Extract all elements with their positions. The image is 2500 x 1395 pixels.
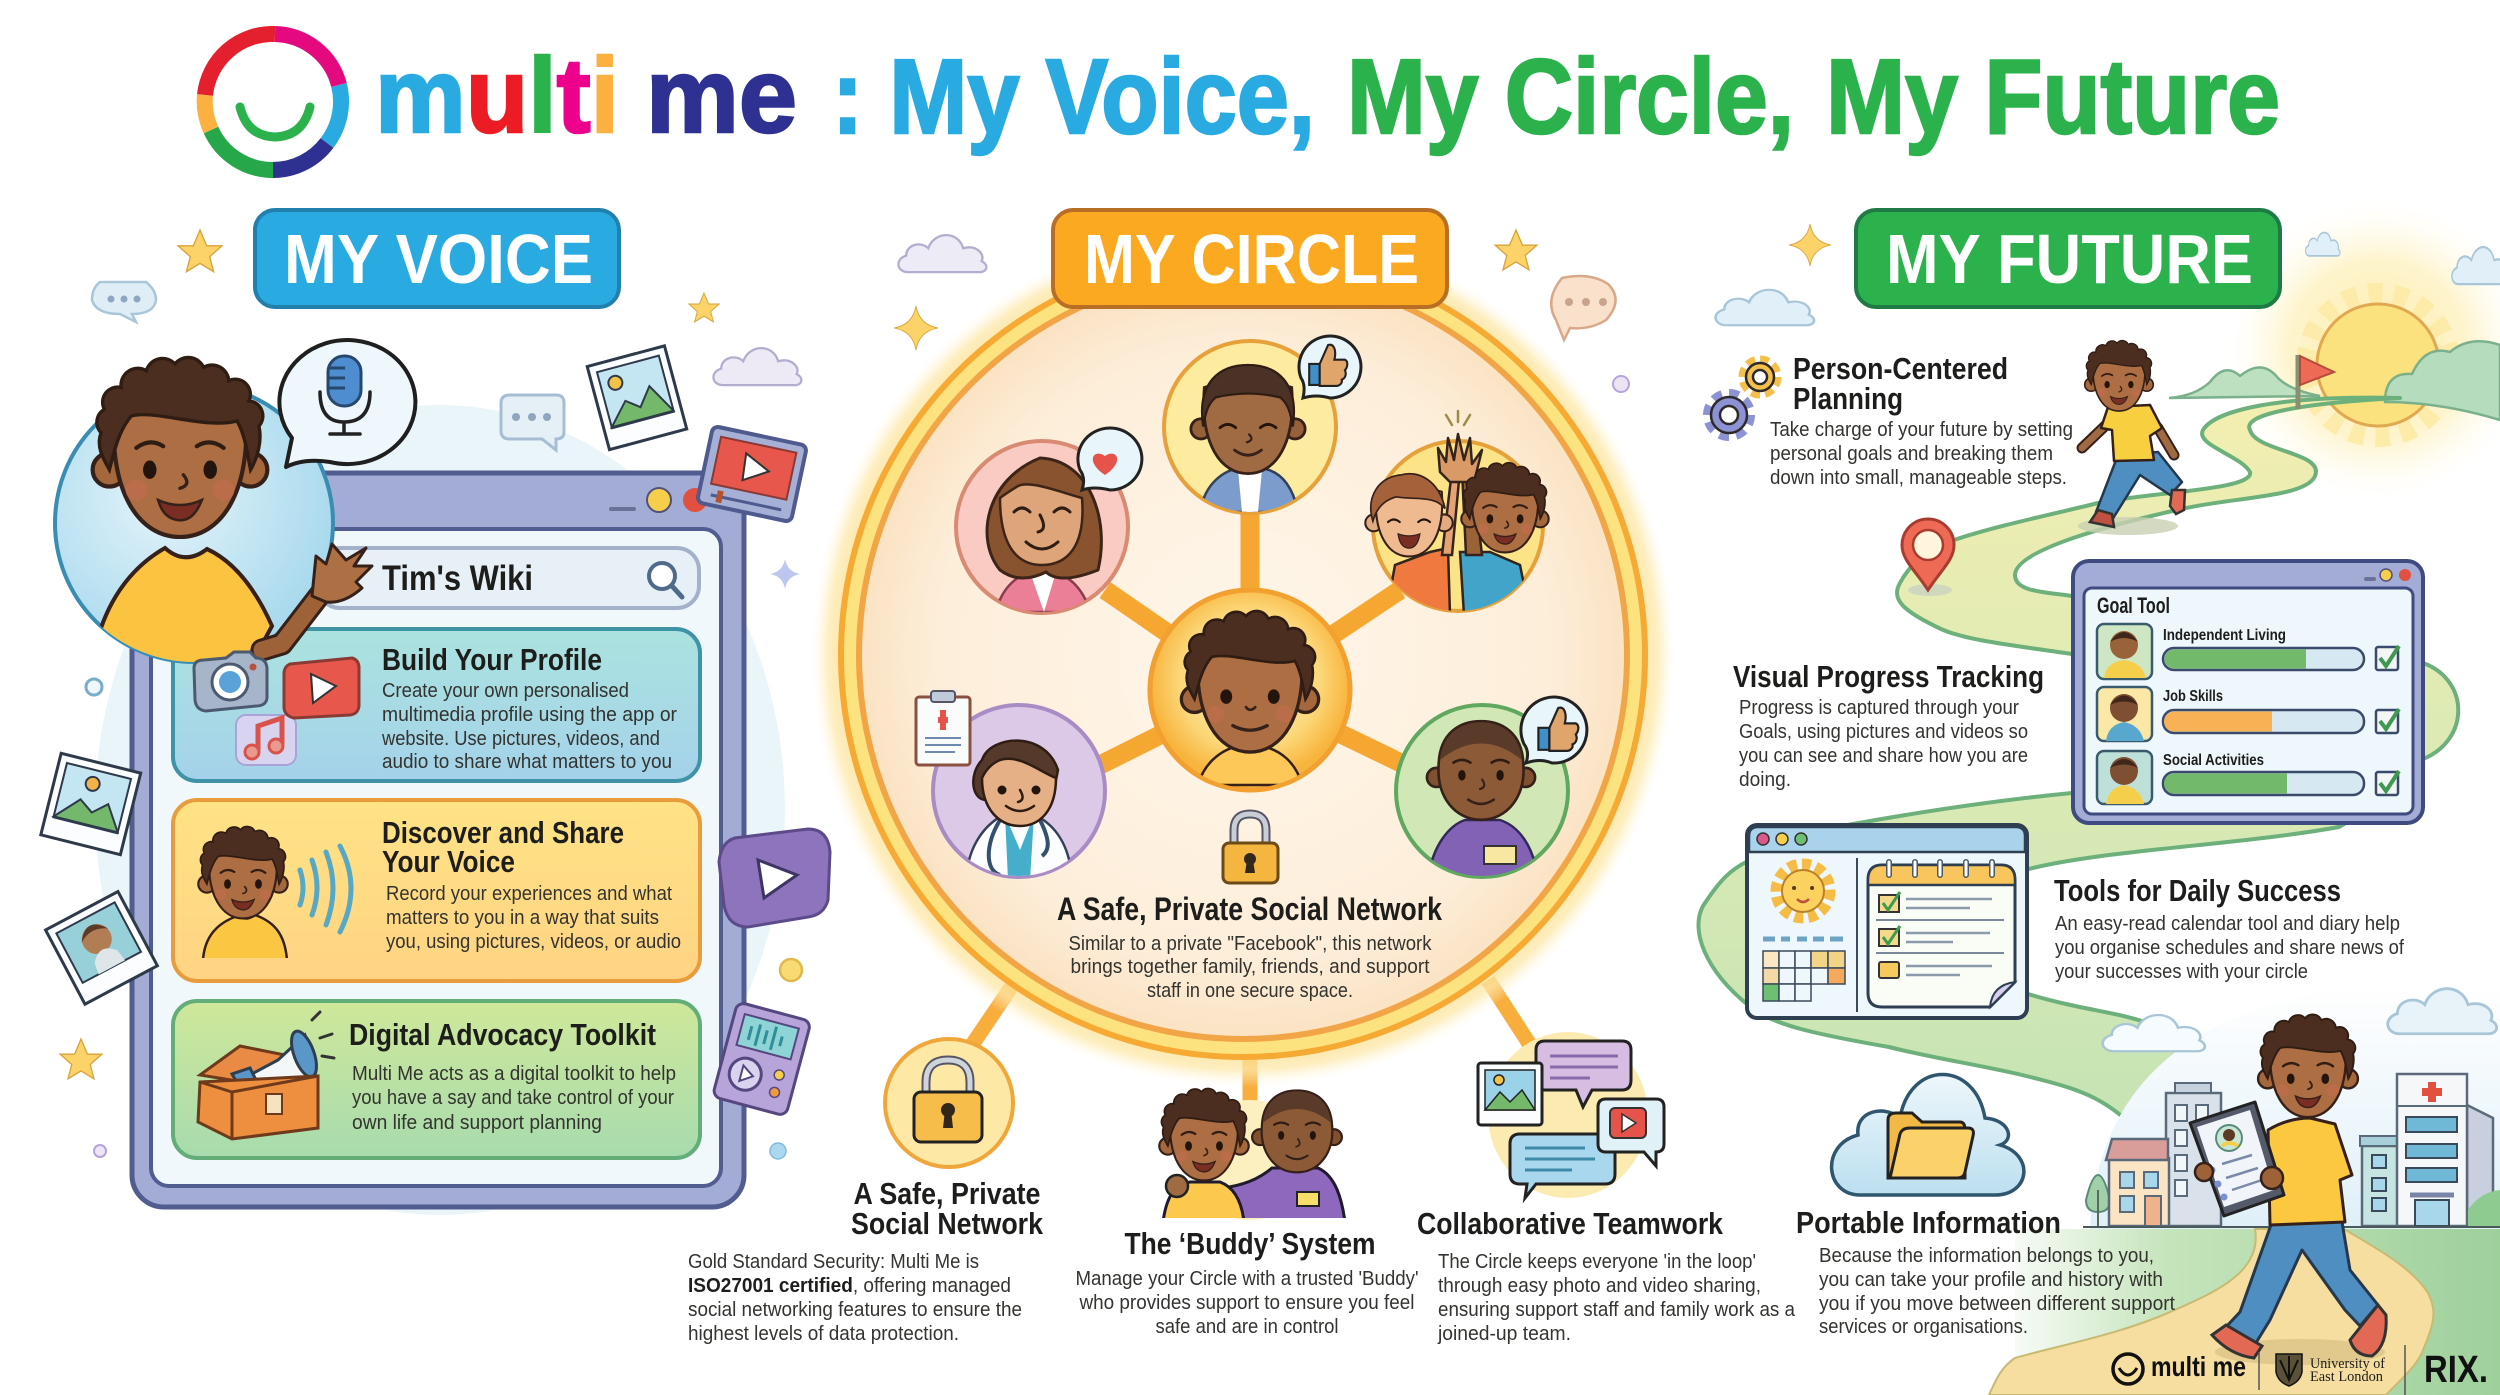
logo: RIX: RIX. — [2424, 1349, 2488, 1391]
browser window frame — [132, 473, 744, 1207]
icon: chat bubble — [501, 395, 564, 450]
window: goal tool — [2073, 561, 2423, 823]
text: person-centered planning: Person-Centered — [1793, 351, 2008, 386]
card: discover and share your voice: you, using pictures, videos, or audio — [386, 931, 681, 953]
text: visual progress tracking: doing. — [1739, 769, 1791, 791]
text: a safe, private social network — [1057, 891, 1442, 1002]
text: a safe, private social network: A Safe, Private Social Network — [1057, 891, 1442, 927]
search bar: Tim's Wiki — [318, 548, 699, 608]
item: safe private social network: social networking features to ensure the — [688, 1299, 1022, 1321]
member: man with thumbs up — [1164, 336, 1361, 513]
scenery: sun and hills — [2169, 200, 2500, 500]
card: digital advocacy toolkit: Multi Me acts as a digital toolkit to help — [352, 1063, 676, 1085]
icon: audio player — [712, 1002, 811, 1116]
tablet — [2190, 1102, 2284, 1216]
heading: My Voice, My Circle, My Future: My Future — [1826, 38, 2280, 156]
text: a safe, private social network: Similar to a private "Facebook", this network — [1068, 933, 1432, 955]
icon: video top right — [697, 426, 807, 522]
text: person-centered planning: Planning — [1793, 381, 1903, 416]
item: collaborative teamwork: Collaborative Teamwork — [1417, 1206, 1724, 1241]
text: portable information: Portable Information — [1796, 1205, 2061, 1240]
item: collaborative teamwork: ensuring support staff and family work as a — [1438, 1299, 1796, 1321]
text: tools for daily success — [2054, 873, 2404, 983]
item: safe private social network: Social Network — [851, 1206, 1044, 1241]
connector lines to lower items — [972, 980, 1532, 1104]
title: logo and heading — [205, 34, 2280, 170]
text: person-centered planning: Take charge of your future by setting — [1770, 419, 2073, 441]
town buildings — [2086, 1074, 2500, 1226]
decorative stars, sparkles and dots — [60, 230, 802, 1159]
icon: smiling sun — [1776, 864, 1830, 918]
heading: My Voice, My Circle, My Future: : My Voice, — [832, 38, 1315, 156]
text: visual progress tracking: Progress is captured through your — [1739, 697, 2019, 719]
text: visual progress tracking: you can see and share how you are — [1739, 745, 2028, 767]
item: collaborative teamwork: The Circle keeps everyone 'in the loop' — [1438, 1251, 1756, 1273]
avatar: tim waving — [55, 357, 372, 670]
logo: multi me: multi me — [2151, 1351, 2246, 1382]
card: discover and share your voice: Discover and Share — [382, 815, 624, 850]
icon: photo left — [41, 753, 141, 855]
icon: portrait photo left — [46, 892, 157, 1004]
clouds — [1716, 224, 2500, 325]
logo: university of east london: University of — [2310, 1356, 2385, 1372]
item: safe private social network — [688, 1039, 1044, 1345]
brand name: multi me: me — [646, 37, 797, 155]
panel: my future — [1698, 200, 2500, 1395]
icon: photo top right — [587, 346, 687, 450]
goal row: independent living: Independent Living — [2163, 627, 2286, 644]
item: safe private social network: ISO27001 certified, offering managed — [688, 1275, 1011, 1297]
illustration: boy with tablet — [2190, 1015, 2386, 1365]
partner logos — [2113, 1345, 2488, 1395]
icon: flag — [2298, 355, 2334, 409]
icon: toolbox with megaphone — [198, 1012, 334, 1139]
text: visual progress tracking: Visual Progress Tracking — [1733, 659, 2044, 694]
backdrop blob — [95, 405, 785, 1215]
speech bubble: microphone — [279, 340, 415, 467]
brand name: multi me: multi — [375, 37, 619, 155]
logo: multi me — [2113, 1351, 2246, 1384]
icon: cloud with folder — [1832, 1074, 2024, 1195]
brand name: multi me — [375, 37, 797, 155]
item: safe private social network: highest levels of data protection. — [688, 1323, 959, 1345]
text: tools for daily success: An easy-read calendar tool and diary help — [2055, 913, 2400, 935]
goal row: job skills — [2097, 687, 2399, 741]
icon: lock badge — [885, 1039, 1013, 1167]
text: a safe, private social network: brings together family, friends, and support — [1070, 956, 1430, 978]
window: calendar and diary — [1747, 825, 2027, 1018]
item: safe private social network: Gold Standard Security: Multi Me is — [688, 1251, 979, 1273]
goal row: social activities: Social Activities — [2163, 752, 2264, 769]
member: friends high five — [1365, 411, 1549, 615]
text: tools for daily success: you organise schedules and share news of — [2055, 937, 2404, 959]
icon: music note — [236, 715, 296, 765]
card: build your profile: website. Use pictures, videos, and — [381, 728, 660, 750]
icon: video play — [284, 658, 359, 718]
item: the buddy system: who provides support to ensure you feel — [1079, 1292, 1414, 1314]
text: person-centered planning — [1709, 351, 2073, 489]
card: digital advocacy toolkit: you have a say and take control of your — [352, 1087, 674, 1109]
heading: My Voice, My Circle, My Future: My Circle, — [1347, 38, 1794, 156]
text: visual progress tracking — [1733, 659, 2044, 791]
illustration: boy walking on road — [2078, 340, 2185, 535]
decorations around circle — [894, 230, 1629, 392]
item: the buddy system — [1076, 1089, 1418, 1338]
diary page — [1868, 862, 2015, 1007]
heading: My Voice, My Circle, My Future — [832, 38, 2280, 156]
icon: cloud — [713, 348, 801, 385]
logo: university of east london — [2276, 1354, 2385, 1386]
card: build your profile: Create your own personalised — [382, 680, 629, 702]
button: MY FUTURE: MY FUTURE — [1886, 220, 2253, 298]
item: the buddy system: The ‘Buddy’ System — [1124, 1226, 1376, 1261]
icon: purple play button — [719, 829, 830, 927]
winding road — [1698, 398, 2458, 1229]
member: woman with heart — [956, 428, 1142, 613]
member: carer with clipboard — [916, 691, 1105, 880]
card: discover and share your voice: matters to you in a way that suits — [386, 907, 659, 929]
icon: chat, photo and video bubbles — [1478, 1032, 1664, 1198]
text: portable information: services or organisations. — [1819, 1316, 2028, 1338]
icon: location pin — [1902, 519, 1954, 596]
card: discover and share your voice: Record your experiences and what — [386, 883, 672, 905]
text: portable information — [1796, 1205, 2175, 1338]
network spokes — [1100, 505, 1405, 765]
text: tools for daily success: your successes with your circle — [2055, 961, 2308, 983]
text: portable information: you if you move between different support — [1819, 1293, 2175, 1315]
icon: multi me ring logo — [205, 34, 341, 170]
outer ring — [811, 223, 1675, 1087]
item: safe private social network: A Safe, Private — [854, 1176, 1040, 1211]
card: build your profile — [173, 629, 700, 781]
text: person-centered planning: down into small, manageable steps. — [1770, 467, 2067, 489]
item: the buddy system: Manage your Circle with a trusted 'Buddy' — [1076, 1268, 1418, 1290]
card: discover and share your voice — [173, 800, 700, 981]
icon: gears — [1709, 361, 1776, 435]
goal row: independent living — [2097, 624, 2399, 679]
item: the buddy system: safe and are in control — [1156, 1316, 1338, 1338]
centre: you — [1150, 590, 1350, 790]
member: support worker with badge — [1396, 697, 1587, 880]
illustration: speaking boy — [198, 827, 351, 960]
window: goal tool: Goal Tool — [2097, 593, 2170, 618]
card: build your profile: audio to share what matters to you — [382, 751, 672, 773]
text: portable information: you can take your profile and history with — [1819, 1269, 2163, 1291]
search bar: Tim's Wiki: Tim's Wiki — [382, 559, 533, 598]
calendar grid — [1763, 939, 1845, 1001]
card: build your profile: Build Your Profile — [382, 642, 602, 677]
logo: university of east london: East London — [2310, 1369, 2383, 1385]
card: digital advocacy toolkit: own life and support planning — [352, 1112, 602, 1134]
card: discover and share your voice: Your Voice — [382, 844, 515, 879]
goal row: social activities — [2097, 751, 2399, 804]
button: MY CIRCLE: MY CIRCLE — [1084, 220, 1419, 298]
item: collaborative teamwork: through easy photo and video sharing, — [1438, 1275, 1761, 1297]
text: a safe, private social network: staff in one secure space. — [1147, 980, 1353, 1002]
card: digital advocacy toolkit: Digital Advocacy Toolkit — [349, 1017, 656, 1052]
card: digital advocacy toolkit — [173, 1001, 700, 1158]
button: MY VOICE: MY VOICE — [284, 220, 593, 298]
text: person-centered planning: personal goals and breaking them — [1770, 443, 2053, 465]
text: portable information: Because the information belongs to you, — [1819, 1245, 2154, 1267]
icon: padlock — [1223, 814, 1278, 883]
text: visual progress tracking: Goals, using pictures and videos so — [1739, 721, 2028, 743]
panel: my voice — [41, 210, 830, 1215]
icon: camera — [194, 652, 267, 711]
goal row: job skills: Job Skills — [2163, 688, 2223, 705]
item: collaborative teamwork: joined-up team. — [1437, 1323, 1571, 1345]
illustration: two buddies — [1159, 1089, 1345, 1222]
panel: my circle — [688, 210, 1796, 1345]
scenery: sky, ground and town — [1989, 985, 2500, 1395]
text: tools for daily success: Tools for Daily Success — [2054, 873, 2341, 908]
item: collaborative teamwork — [1417, 1032, 1796, 1345]
card: build your profile: multimedia profile using the app or — [382, 704, 677, 726]
